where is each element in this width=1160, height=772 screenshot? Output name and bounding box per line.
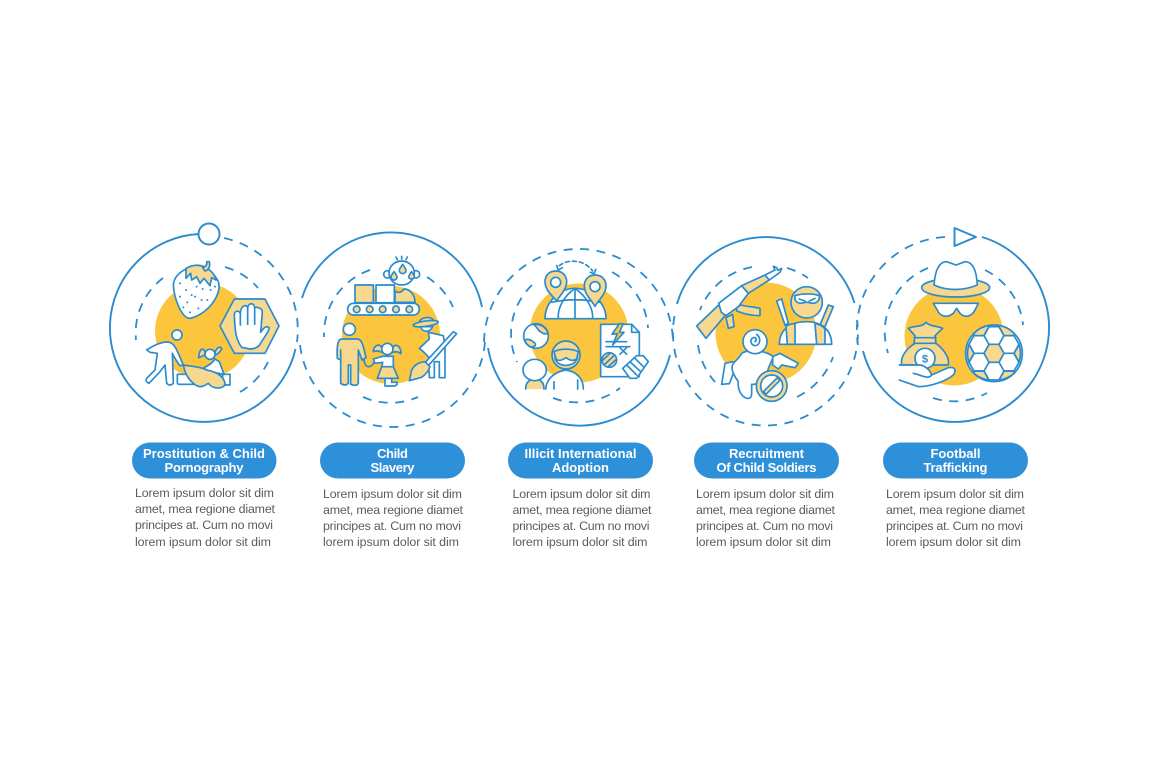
panel: child slavery [300, 232, 485, 549]
body text 3: lorem ipsum dolor sit dim [512, 535, 648, 549]
body text 4: principes at. Cum no movi [696, 519, 833, 533]
yellow disc 5 [904, 286, 1004, 386]
body text 4: Lorem ipsum dolor sit dim [696, 487, 834, 501]
icon: torn contract and handshake [601, 324, 648, 378]
icon: strawberry [173, 262, 219, 318]
label pill 3: Adoption [552, 460, 609, 475]
body text 4: amet, mea regione diamet [696, 503, 836, 517]
arrow: play triangle [954, 228, 976, 246]
icon: bed with child [177, 347, 230, 388]
icon: football [966, 325, 1022, 382]
icon: small earth [524, 324, 548, 348]
body text 1: principes at. Cum no movi [135, 518, 273, 532]
body text 1: amet, mea regione diamet [135, 502, 276, 516]
yellow disc 3 [530, 284, 628, 382]
icon: strawberry, stop hand, figures [146, 262, 279, 388]
label pill 1: Pornography [164, 460, 244, 475]
timeline ring 5 [857, 228, 1049, 422]
label pill 1: Prostitution & Child [143, 446, 265, 461]
body text 1: Lorem ipsum dolor sit dim [135, 486, 274, 500]
body text 1: lorem ipsum dolor sit dim [135, 535, 271, 549]
label pill 1 [132, 442, 276, 478]
icon: crying baby, conveyor, man, girl, farmer [337, 256, 457, 386]
label pill 2 [320, 442, 465, 478]
timeline ring 1 [110, 224, 298, 422]
body text 5: Lorem ipsum dolor sit dim [886, 487, 1024, 501]
icon: masked trafficker [546, 341, 583, 389]
icon: child head [523, 359, 546, 389]
timeline ring 4 [673, 237, 858, 426]
label pill 5: Trafficking [924, 460, 988, 475]
panel: illicit international adoption [484, 249, 673, 549]
body text 1 [135, 486, 276, 549]
body text 2 [323, 487, 464, 549]
icon: globe with location pins [545, 261, 606, 319]
body text 4 [696, 487, 836, 549]
label pill 4 [694, 442, 839, 478]
body text 2: amet, mea regione diamet [323, 503, 464, 517]
body text 4: lorem ipsum dolor sit dim [696, 535, 831, 549]
icon: hat, glasses, money bag, ball [899, 262, 1022, 387]
body text 3 [512, 487, 652, 549]
timeline ring 3 [484, 249, 673, 426]
icon: crying baby on conveyor [348, 256, 420, 315]
icon: farmer with shovel [409, 317, 457, 381]
body text 2: principes at. Cum no movi [323, 519, 461, 533]
body text 2: Lorem ipsum dolor sit dim [323, 487, 462, 501]
yellow disc 2 [342, 286, 440, 384]
label pill 5: Football [930, 446, 980, 461]
icon: ban sign [756, 371, 787, 401]
body text 2: lorem ipsum dolor sit dim [323, 535, 459, 549]
panel: recruitment of child soldiers [673, 237, 858, 549]
icon: masked soldier [777, 287, 833, 344]
icon: assault rifle [697, 266, 782, 338]
panel: prostitution and child pornography [110, 224, 298, 549]
yellow disc 1 [155, 283, 251, 379]
label pill 3 [508, 442, 653, 478]
label pill 2: Child [377, 446, 408, 461]
icon: rifle, soldier, child, guns, ban sign [697, 266, 833, 401]
body text 3: Lorem ipsum dolor sit dim [512, 487, 650, 501]
icon: globe, pins, people, contract [523, 261, 648, 389]
icon: money bag on hand: $ [922, 353, 929, 365]
body text 5: principes at. Cum no movi [886, 519, 1023, 533]
yellow disc 4 [716, 282, 816, 384]
body text 3: amet, mea regione diamet [512, 503, 652, 517]
icon: armed child [722, 330, 798, 398]
label pill 4: Recruitment [729, 446, 805, 461]
icon: hat [922, 262, 990, 297]
body text 5 [886, 487, 1026, 549]
label pill 5 [883, 442, 1028, 478]
label pill 2: Slavery [370, 460, 415, 475]
timeline ring 2 [300, 232, 485, 427]
icon: bending man [146, 330, 183, 385]
body text 5: amet, mea regione diamet [886, 503, 1026, 517]
icon: stop hand hexagon [220, 299, 279, 353]
body text 3: principes at. Cum no movi [512, 519, 650, 533]
icon: man [337, 323, 375, 385]
icon: sunglasses [933, 303, 978, 316]
label pill 4: Of Child Soldiers [716, 460, 816, 475]
label pill 3: Illicit International [524, 446, 636, 461]
body text 5: lorem ipsum dolor sit dim [886, 535, 1021, 549]
panel: football trafficking [857, 228, 1049, 549]
icon: girl [373, 343, 401, 386]
